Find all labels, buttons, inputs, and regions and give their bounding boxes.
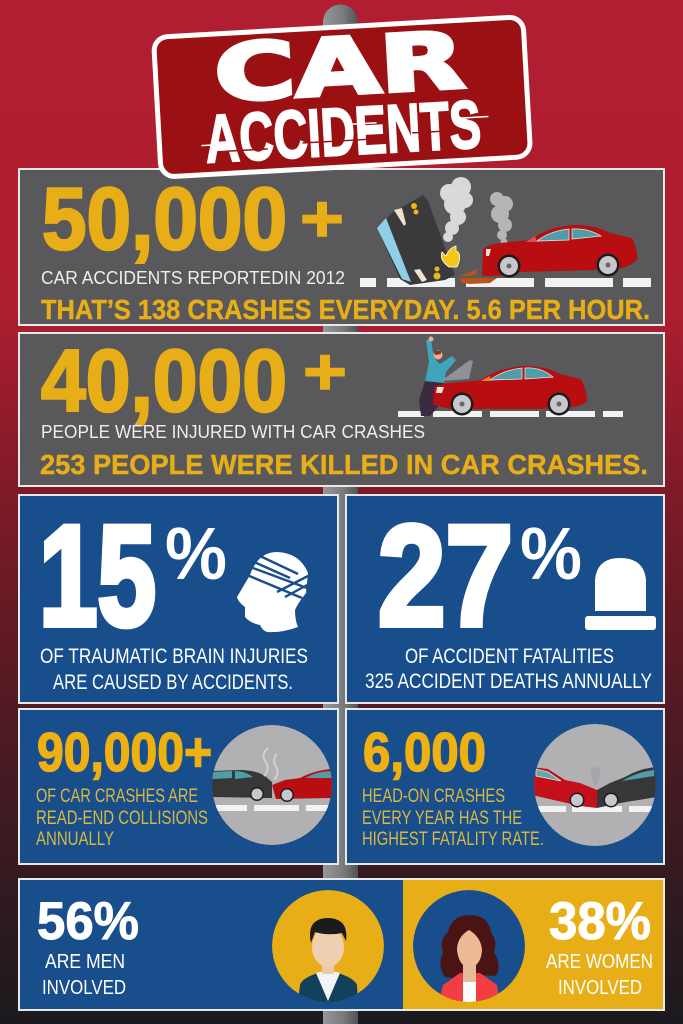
road markings [398,411,623,417]
panel: gender split [19,879,664,1010]
stat: 38%: 38% [549,892,651,951]
stat: 6,000: 6,000 [363,721,486,783]
caption [40,645,308,694]
percent sign: % [165,512,227,595]
icon: smoke right [490,192,513,246]
road markings [360,278,651,287]
signpost pole [323,5,358,1024]
title sign [153,13,531,180]
icon: injured person [419,336,456,416]
icon: bandaged head [237,552,309,632]
caption: women: INVOLVED [558,977,642,999]
icon: siren [585,558,656,630]
caption: ANNUALLY [36,829,114,850]
icon: woman avatar [413,890,525,1002]
highlight line: 253 PEOPLE WERE KILLED IN CAR CRASHES. [40,449,648,480]
caption: HIGHEST FATALITY RATE. [362,829,544,850]
icon: man avatar [272,890,384,1002]
icon: fire [441,246,460,267]
icon: overturned car [377,195,455,285]
stat: 27: 27 [378,497,513,656]
caption: men: INVOLVED [42,977,126,999]
caption [36,786,208,850]
icon: red car [482,225,637,278]
icon: oil spill [458,269,497,284]
caption: READ-END COLLISIONS [36,808,208,829]
caption [362,786,544,850]
panel: 27% fatalities [346,495,664,703]
caption: men [42,951,126,999]
caption: ARE CAUSED BY ACCIDENTS. [53,671,293,694]
title: ACCIDENTS: ACCIDENTS [203,86,483,178]
caption: women: ARE WOMEN [546,951,653,973]
stat: 90,000+: 90,000+ [37,721,212,783]
caption: OF CAR CRASHES ARE [36,786,198,807]
caption: men: ARE MEN [45,951,125,973]
panel: 50,000 crashes [19,169,664,325]
icon: head-on collision [532,724,657,846]
panel: 6,000 head-on [346,709,664,864]
panel: 15% brain injuries [19,495,338,703]
panel: 40,000 injured [19,331,664,486]
panel: 90,000 rear-end [19,709,338,864]
caption: HEAD-ON CRASHES [362,786,505,807]
icon: red car [433,366,587,416]
stat: 56%: 56% [37,892,139,951]
stat: 40,000+: 40,000 [41,331,287,430]
caption: OF ACCIDENT FATALITIES [405,645,614,668]
caption: PEOPLE WERE INJURED WITH CAR CRASHES [41,422,425,442]
caption [365,645,652,693]
panel: women background [403,880,663,1009]
plus sign: + [303,334,347,408]
icon: open hood [441,360,473,381]
caption: OF TRAUMATIC BRAIN INJURIES [40,645,308,668]
title: CAR: CAR [212,16,467,120]
stat: 15: 15 [39,497,156,656]
stat: 50,000+: 50,000 [42,169,287,268]
icon: rear-end collision [212,725,336,845]
plus sign: + [300,181,344,255]
caption: women [546,951,653,999]
icon: smoke left [440,177,473,242]
title: ACCIDENTS [199,86,491,178]
percent sign: % [520,512,582,595]
caption: EVERY YEAR HAS THE [362,808,522,829]
caption: CAR ACCIDENTS REPORTEDIN 2012 [41,268,345,288]
